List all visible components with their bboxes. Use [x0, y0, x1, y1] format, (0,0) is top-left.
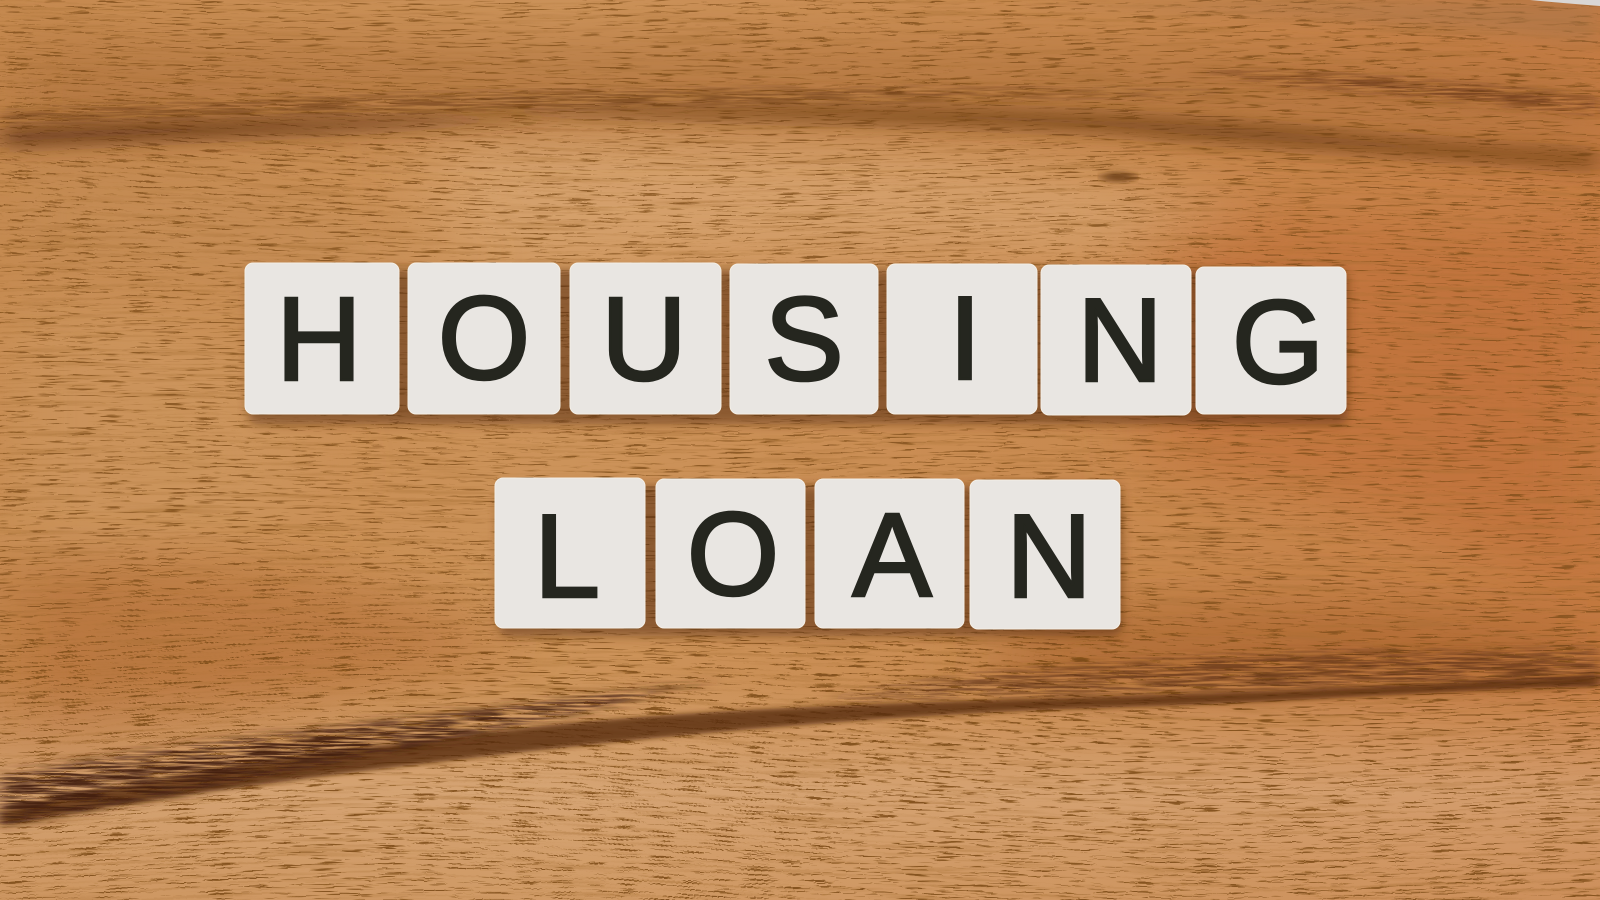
tile H [245, 263, 399, 414]
tile O [656, 479, 805, 628]
tile L: L [534, 490, 600, 623]
small top pale strip [1530, 0, 1600, 6]
knot [1101, 172, 1135, 182]
tile shadows [248, 270, 1348, 424]
tile I [887, 264, 1037, 414]
tile G: G [1232, 276, 1324, 409]
tile H: H [276, 273, 362, 406]
tile O: O [438, 272, 530, 405]
tile I: I [948, 272, 982, 405]
tile shadows [498, 486, 1122, 636]
tile O: O [687, 488, 779, 621]
tile N: N [1006, 490, 1092, 623]
tile N [970, 480, 1120, 629]
word: LOAN [495, 478, 1122, 636]
tile U: U [601, 273, 687, 406]
tile U [570, 263, 721, 414]
tile A: A [852, 489, 932, 622]
tile L [495, 478, 645, 628]
tile N [1041, 265, 1191, 415]
tile G [1196, 267, 1346, 414]
tile O [408, 263, 560, 414]
tile S: S [764, 273, 844, 406]
tile S [730, 264, 878, 414]
tile N: N [1077, 274, 1163, 407]
word: HOUSING [245, 263, 1348, 424]
tile A [815, 479, 964, 628]
